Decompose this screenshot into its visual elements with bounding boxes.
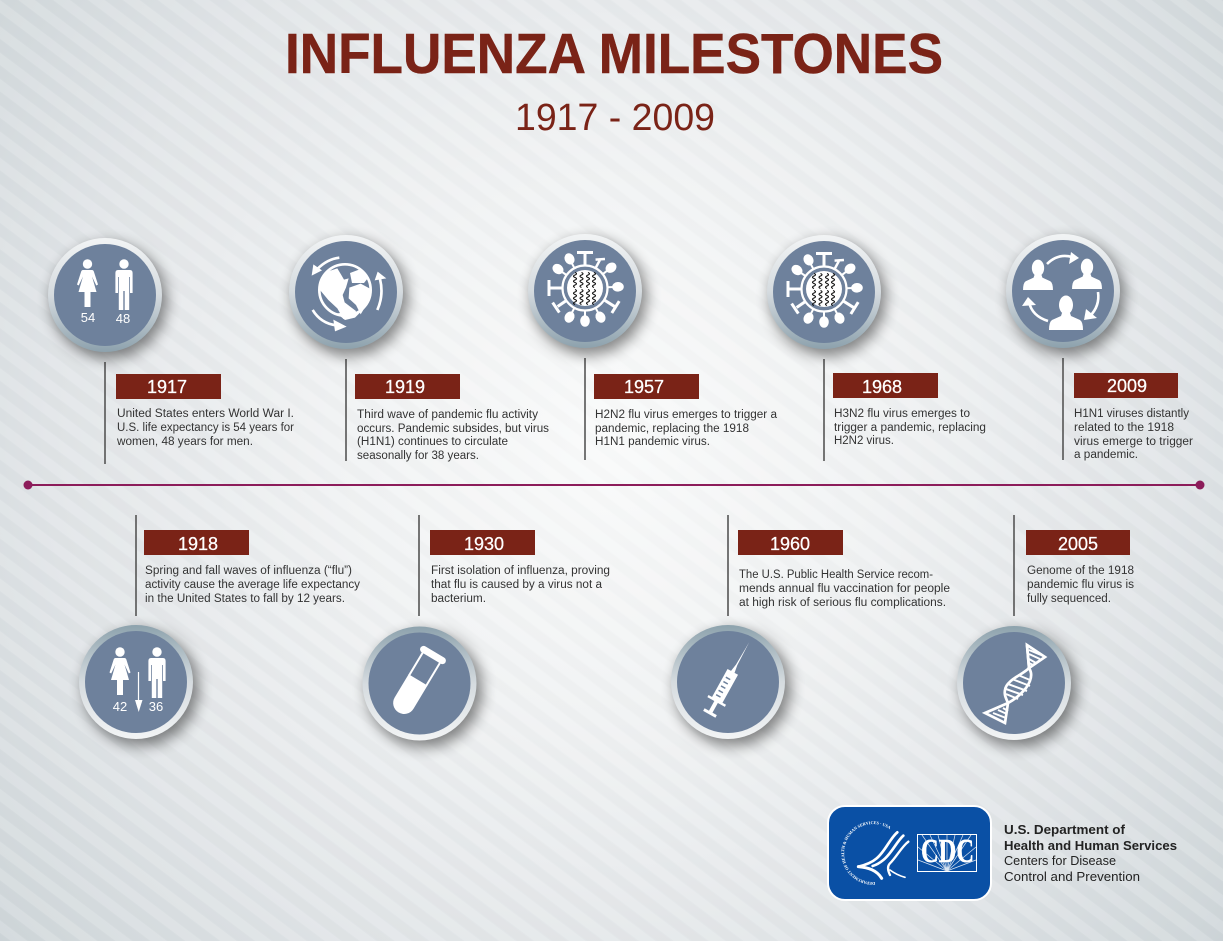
year label 1968: 1968	[862, 377, 902, 397]
icon: DNA helix	[957, 626, 1077, 747]
footer: agency names: Centers for Disease	[1004, 853, 1116, 868]
icon: H3N2 virus	[767, 235, 886, 356]
text 1968: H2N2 virus.	[834, 435, 894, 447]
text 1918: in the United States to fall by 12 years.	[145, 593, 345, 605]
icon: test tube	[362, 626, 482, 748]
text 1957: pandemic, replacing the 1918	[595, 423, 749, 435]
title: INFLUENZA MILESTONES	[285, 22, 943, 86]
CDC mark	[918, 833, 976, 872]
milestone 1968	[767, 235, 986, 461]
text 1919: Third wave of pandemic flu activity	[357, 409, 538, 421]
subtitle: 1917 - 2009	[515, 97, 715, 139]
year label 2009	[1074, 373, 1178, 398]
footer: agency names: U.S. Department of	[1004, 822, 1126, 837]
year label 2005	[1026, 530, 1130, 555]
text 1917: women, 48 years for men.	[116, 436, 253, 448]
text 1919: occurs. Pandemic subsides, but virus	[357, 423, 549, 435]
footer: agency names: Health and Human Services	[1004, 838, 1177, 853]
icon: woman and man, life expectancy 54 and 48: 48	[116, 311, 130, 326]
text 2005	[1027, 565, 1134, 605]
text 2005: Genome of the 1918	[1027, 565, 1134, 577]
year label 1960: 1960	[770, 534, 810, 554]
icon: H2N2 virus	[528, 234, 647, 355]
footer: CDC logo	[827, 805, 992, 901]
year label 2005: 2005	[1058, 534, 1098, 554]
text 1957: H1N1 pandemic virus.	[595, 436, 710, 448]
text 1957	[595, 409, 778, 448]
milestone 1918	[79, 515, 360, 746]
text 1919: seasonally for 38 years.	[357, 450, 479, 462]
HHS seal: DEPARTMENT OF HEALTH & HUMAN SERVICES · USA	[841, 821, 890, 885]
text 1930: that flu is caused by a virus not a	[431, 579, 603, 591]
year label 2009: 2009	[1107, 376, 1147, 396]
milestone 1930	[362, 515, 610, 748]
text 1918	[145, 565, 360, 605]
text 1930: First isolation of influenza, proving	[431, 565, 610, 577]
footer: agency names: Control and Prevention	[1004, 869, 1140, 884]
icon: syringe	[671, 625, 791, 746]
icon: woman and man, life expectancy down to 42 and 36: 36	[149, 699, 163, 714]
text 1919: (H1N1) continues to circulate	[357, 436, 508, 448]
text 2009: related to the 1918	[1074, 422, 1174, 434]
year label 1918	[144, 530, 249, 555]
milestone 2005	[957, 515, 1134, 747]
year label 1918: 1918	[178, 534, 218, 554]
text 1960: The U.S. Public Health Service recom-	[739, 569, 933, 581]
year label 1919: 1919	[385, 377, 425, 397]
milestone 2009	[1006, 234, 1193, 461]
text 2005: pandemic flu virus is	[1027, 579, 1134, 591]
milestone 1919	[289, 235, 549, 462]
year label 1917	[116, 374, 221, 399]
text 1968	[834, 408, 986, 447]
milestone 1957	[528, 234, 778, 460]
text 1917: United States enters World War I.	[117, 408, 294, 420]
text 2005: fully sequenced.	[1027, 593, 1111, 605]
year label 1917: 1917	[147, 377, 187, 397]
text 1930: bacterium.	[431, 593, 486, 605]
footer: agency names	[1004, 822, 1177, 884]
text 2009: a pandemic.	[1074, 449, 1138, 461]
text 1919	[357, 409, 549, 462]
icon: globe with arrows	[289, 235, 408, 356]
milestone 1917	[48, 238, 294, 464]
text 2009	[1074, 408, 1193, 461]
text 1960: mends annual flu vaccination for people	[739, 583, 950, 595]
text 2009: virus emerge to trigger	[1074, 436, 1193, 448]
milestone 1960	[671, 515, 950, 746]
text 1918: Spring and fall waves of influenza (“flu”)	[145, 565, 352, 577]
timeline axis	[24, 480, 1204, 490]
year label 1930: 1930	[464, 534, 504, 554]
text 1968: trigger a pandemic, replacing	[834, 422, 986, 434]
icon: woman and man, life expectancy 54 and 48	[48, 238, 167, 359]
text 1957: H2N2 flu virus emerges to trigger a	[595, 409, 778, 421]
year label 1957: 1957	[624, 377, 664, 397]
year label 1930	[430, 530, 535, 555]
icon: woman and man, life expectancy 54 and 48: 54	[81, 310, 95, 325]
text 2009: H1N1 viruses distantly	[1074, 408, 1189, 420]
year label 1968	[833, 373, 938, 398]
text 1968: H3N2 flu virus emerges to	[834, 408, 970, 420]
year label 1919	[355, 374, 460, 399]
icon: people passing virus between them	[1006, 234, 1125, 355]
year label 1960	[738, 530, 843, 555]
text 1917: U.S. life expectancy is 54 years for	[117, 422, 294, 434]
year label 1957	[594, 374, 699, 399]
text 1917	[116, 408, 294, 448]
text 1930	[431, 565, 610, 605]
icon: woman and man, life expectancy down to 42 and 36: 42	[113, 699, 127, 714]
text 1960: at high risk of serious flu complications.	[739, 597, 946, 609]
text 1960	[739, 569, 950, 609]
icon: woman and man, life expectancy down to 42 and 36	[79, 625, 199, 746]
text 1918: activity cause the average life expectancy	[145, 579, 360, 591]
CDC mark: CDC	[921, 833, 974, 870]
